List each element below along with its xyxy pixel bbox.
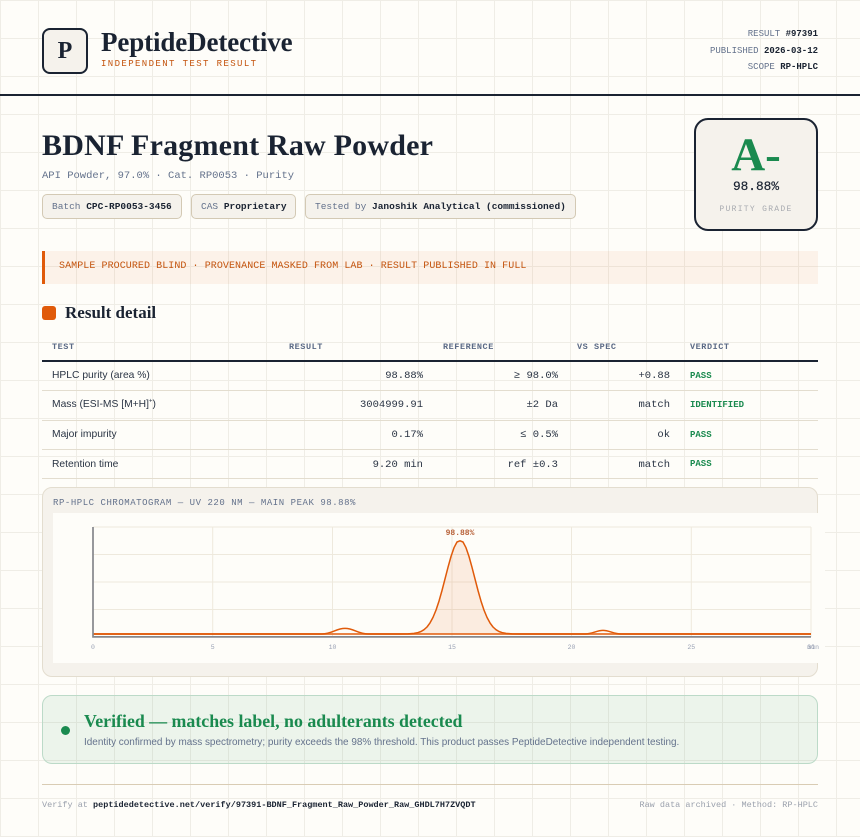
CAS chip: CAS Proprietary <box>201 201 287 212</box>
batch chip <box>42 194 182 219</box>
row: HPLC purity: HPLC purity (area %) <box>52 370 150 381</box>
status dot <box>61 726 70 735</box>
result meta: PUBLISHED 2026-03-12 <box>710 46 818 56</box>
CAS chip <box>191 194 296 219</box>
x axis ticks: 15 <box>448 644 456 651</box>
row: mass: 3004999.91 <box>360 399 423 411</box>
results table <box>42 342 818 479</box>
row: mass: IDENTIFIED <box>690 400 744 410</box>
section heading: Result detail <box>65 303 156 322</box>
provenance notice: SAMPLE PROCURED BLIND · PROVENANCE MASKED FROM LAB · RESULT PUBLISHED IN FULL <box>59 261 526 272</box>
grade letter: A- <box>731 129 781 181</box>
row: mass <box>42 398 818 421</box>
row: retention time: match <box>638 459 670 471</box>
tagline: INDEPENDENT TEST RESULT <box>101 59 257 69</box>
grade label: PURITY GRADE <box>719 205 793 214</box>
table header: VS SPEC <box>577 342 617 352</box>
logo mark: P <box>58 38 72 64</box>
x axis ticks: 25 <box>687 644 695 651</box>
table header: VERDICT <box>690 342 730 352</box>
chart title: RP-HPLC CHROMATOGRAM — UV 220 NM — MAIN PEAK 98.88% <box>53 498 356 508</box>
tested by chip <box>305 194 576 219</box>
result meta: RESULT #97391 <box>748 29 818 39</box>
product title: BDNF Fragment Raw Powder <box>42 129 433 162</box>
main peak fill <box>400 541 520 634</box>
batch chip: Batch CPC-RP0053-3456 <box>52 201 172 212</box>
row: HPLC purity: 98.88% <box>385 370 423 382</box>
table header: REFERENCE <box>443 342 494 352</box>
x axis ticks <box>91 644 819 651</box>
provenance notice <box>42 251 818 284</box>
row: retention time: ref ±0.3 <box>508 459 558 471</box>
row: mass: Mass (ESI-MS [M+H]+) <box>52 399 156 410</box>
grade card <box>694 118 818 231</box>
x axis ticks: 30 <box>807 644 815 651</box>
row: mass: ±2 Da <box>526 399 558 411</box>
row: major impurity: ok <box>657 429 670 441</box>
header <box>0 27 860 96</box>
verdict text: Identity confirmed by mass spectrometry; purity exceeds the 98% threshold. This product passes PeptideDetective independent testing. <box>84 737 679 748</box>
verify link: Verify at peptidedetective.net/verify/97391-BDNF_Fragment_Raw_Powder_Raw_GHDL7H7ZVQDT <box>42 800 476 810</box>
x axis ticks: 5 <box>211 644 215 651</box>
row: major impurity: PASS <box>690 430 712 440</box>
row: HPLC purity: +0.88 <box>638 370 670 382</box>
product subtitle: API Powder, 97.0% · Cat. RP0053 · Purity <box>42 170 294 182</box>
x axis ticks: 0 <box>91 644 95 651</box>
row: retention time: PASS <box>690 459 712 469</box>
row: major impurity: 0.17% <box>391 429 423 441</box>
row: HPLC purity: PASS <box>690 371 712 381</box>
row: retention time: Retention time <box>52 459 118 470</box>
row: major impurity: Major impurity <box>52 429 117 440</box>
result meta <box>710 29 818 72</box>
tested by chip: Tested by Janoshik Analytical (commissioned) <box>315 201 566 212</box>
logo mark <box>42 28 88 74</box>
peak label: 98.88% <box>446 529 475 538</box>
x axis ticks: 20 <box>568 644 575 651</box>
row: mass: match <box>638 399 670 411</box>
archive note: Raw data archived · Method: RP-HPLC <box>639 800 818 810</box>
verdict heading: Verified — matches label, no adulterants detected <box>84 711 462 731</box>
row: major impurity: ≤ 0.5% <box>520 429 558 441</box>
table header <box>42 342 818 362</box>
row: HPLC purity: ≥ 98.0% <box>514 370 558 382</box>
chromatogram chart <box>53 513 825 663</box>
axes <box>93 527 811 637</box>
row: retention time: 9.20 min <box>373 459 423 471</box>
brand name: PeptideDetective <box>101 27 292 57</box>
result meta: SCOPE RP-HPLC <box>748 62 818 72</box>
row: major impurity <box>42 429 818 450</box>
section marker <box>42 306 56 320</box>
purity value: 98.88% <box>733 179 779 194</box>
table header: TEST <box>52 342 75 352</box>
row: retention time <box>42 459 818 479</box>
x axis ticks: 10 <box>329 644 336 651</box>
header rule <box>0 94 860 96</box>
verified banner <box>42 695 818 764</box>
baseline band <box>93 633 811 635</box>
row: HPLC purity <box>42 370 818 391</box>
chromatogram panel <box>42 487 818 677</box>
footer <box>42 784 818 810</box>
table header: RESULT <box>289 342 323 352</box>
x axis ticks: min <box>807 644 819 651</box>
baseline trace with peaks <box>93 541 811 634</box>
